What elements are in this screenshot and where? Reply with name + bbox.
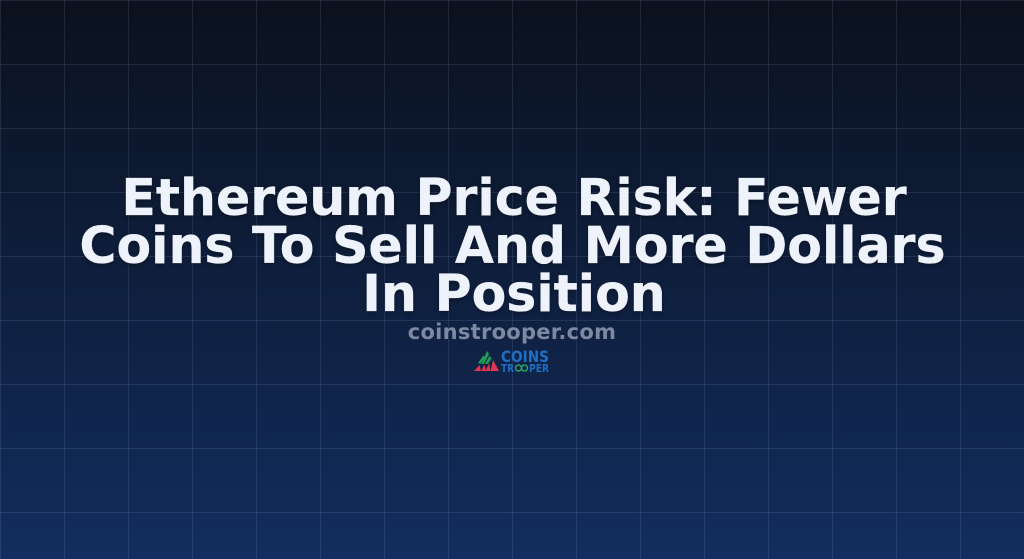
logo: Coins Trooper — [474, 347, 549, 375]
title — [79, 168, 946, 323]
icon: green and red rising stripes — [474, 351, 499, 371]
website label: coinstrooper.com — [408, 320, 616, 344]
wordmark — [501, 347, 549, 375]
wordmark: PER — [529, 363, 549, 375]
wordmark: TR — [501, 363, 514, 375]
title: In Position — [362, 264, 666, 323]
title: Coins To Sell And More Dollars — [79, 216, 946, 275]
title: Ethereum Price Risk: Fewer — [121, 168, 907, 227]
